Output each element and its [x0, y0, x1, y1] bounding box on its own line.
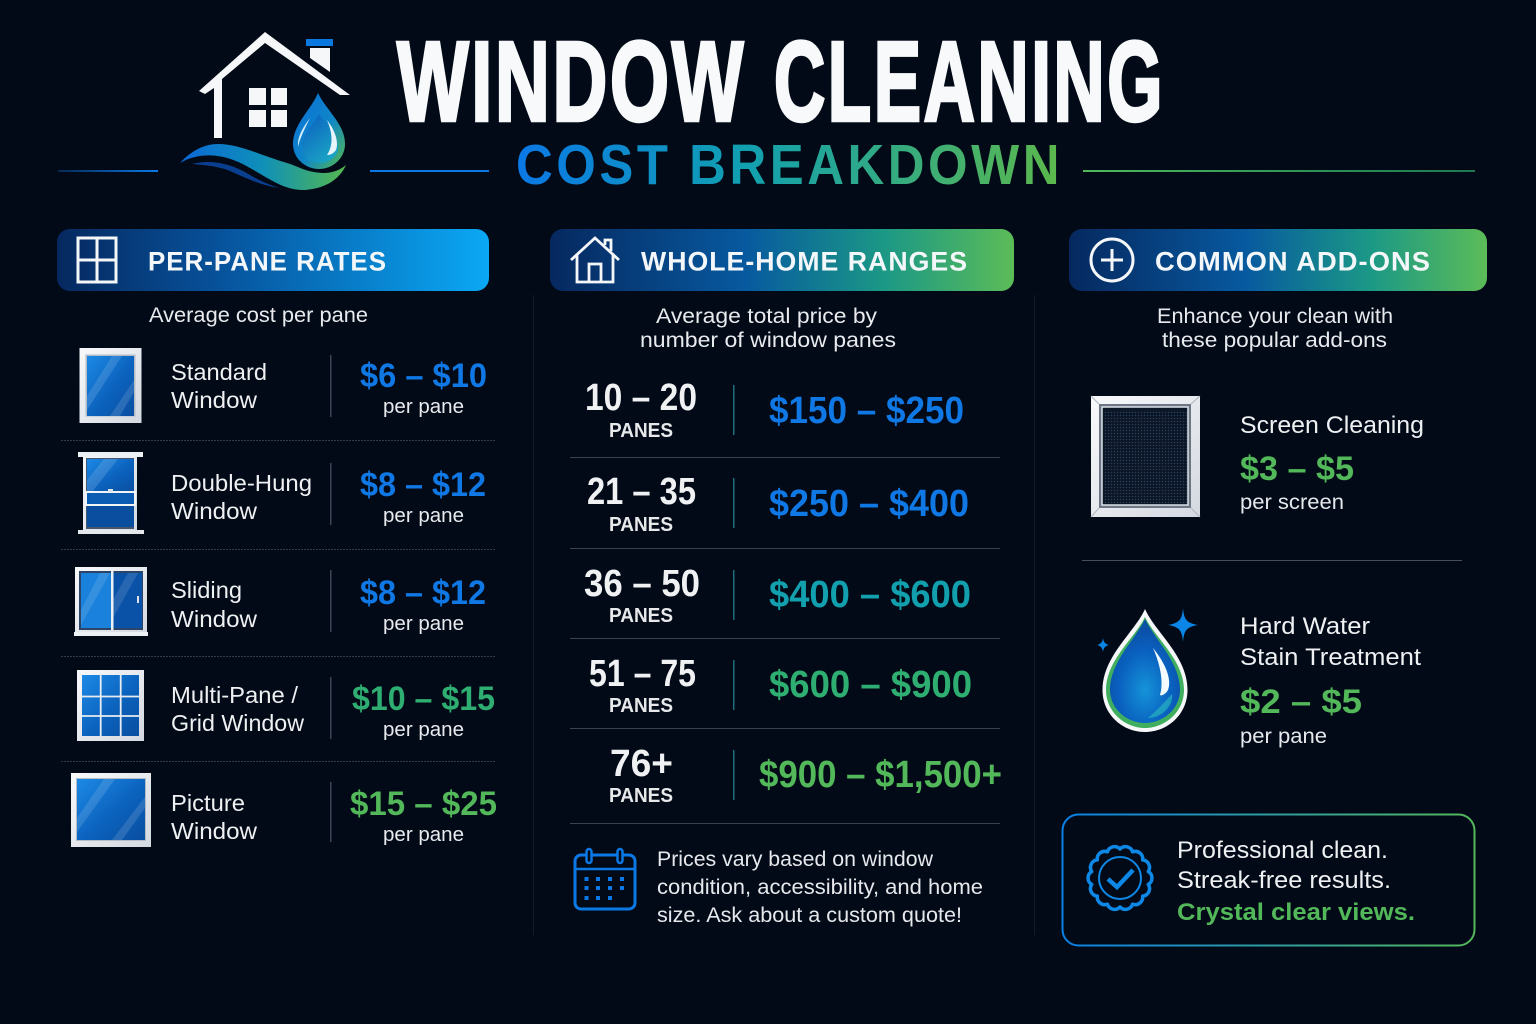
- row: double-hung window: per pane: [383, 504, 464, 527]
- row: sliding window: Window: [171, 606, 257, 632]
- row: 51-75 panes: 51 – 75: [589, 653, 696, 695]
- row: 76+ panes: 76+: [610, 743, 673, 785]
- panel: whole-home ranges: [550, 229, 1014, 927]
- row: 21-35 panes: [587, 471, 969, 536]
- row: 36-50 panes: PANES: [609, 604, 673, 627]
- row: 10-20 panes: [585, 377, 964, 442]
- row: 51-75 panes: $600 – $900: [769, 664, 972, 706]
- row: 21-35 panes: 21 – 35: [587, 471, 696, 513]
- row: standard window: per pane: [383, 395, 464, 418]
- icon: multi-pane window: [77, 670, 144, 741]
- row: sliding window: Sliding: [171, 577, 242, 603]
- row: double-hung window: $8 – $12: [360, 466, 486, 504]
- row: standard window: $6 – $10: [360, 357, 487, 395]
- icon: badge with check: [1088, 847, 1152, 909]
- row: 36-50 panes: [584, 563, 971, 627]
- text: pricing note: Prices vary based on window: [657, 848, 934, 871]
- row: 21-35 panes: PANES: [609, 513, 673, 536]
- icon: house roof and wall: [199, 32, 350, 138]
- heading: per-pane rates: [57, 229, 489, 291]
- add-on: hard water stain treatment: per pane: [1240, 725, 1327, 748]
- row: 51-75 panes: [589, 653, 972, 717]
- icon: water drop with sparkles: [1097, 608, 1198, 732]
- icon: picture window: [71, 773, 151, 847]
- text: whole-home description: [640, 304, 896, 352]
- row: sliding window: per pane: [383, 612, 464, 635]
- text: whole-home description: number of window panes: [640, 328, 896, 352]
- callout: crystal clear views: [1062, 814, 1474, 946]
- row: 76+ panes: [609, 743, 1002, 807]
- icon: house window: [249, 88, 287, 127]
- icon: plus in circle: [1091, 239, 1133, 281]
- heading: whole-home ranges: [550, 229, 1014, 291]
- row: 10-20 panes: 10 – 20: [585, 377, 697, 419]
- row: multi-pane window: [77, 670, 495, 741]
- text: pricing note: condition, accessibility, and home: [657, 876, 983, 899]
- row: 21-35 panes: $250 – $400: [769, 483, 969, 525]
- panel: common add-ons: [1062, 229, 1487, 946]
- row: 76+ panes: $900 – $1,500+: [759, 754, 1002, 796]
- add-on: screen cleaning: [1091, 396, 1424, 517]
- text: pricing note: [657, 848, 983, 927]
- logo: house with water drop: [180, 32, 350, 190]
- add-on: hard water stain treatment: $2 – $5: [1240, 683, 1362, 721]
- text: add-ons description: these popular add-ons: [1162, 328, 1387, 352]
- text: whole-home description: Average total price by: [656, 304, 877, 328]
- row: multi-pane window: $10 – $15: [352, 680, 495, 718]
- title: CLEANING: [774, 18, 1165, 144]
- row: picture window: Window: [171, 818, 257, 844]
- icon: window screen: [1091, 396, 1200, 517]
- heading text: PER-PANE RATES: [148, 246, 387, 276]
- row: standard window: [80, 348, 487, 423]
- callout: crystal clear views: Professional clean.: [1177, 837, 1388, 864]
- title: WINDOW: [397, 18, 746, 144]
- callout: crystal clear views: Streak-free results.: [1177, 867, 1391, 894]
- row: 10-20 panes: $150 – $250: [769, 390, 964, 432]
- add-on: screen cleaning: Screen Cleaning: [1240, 412, 1424, 439]
- row: multi-pane window: per pane: [383, 718, 464, 741]
- icon: window grid: [78, 238, 116, 282]
- row: double-hung window: Double-Hung: [171, 470, 312, 496]
- icon: house outline: [571, 238, 619, 282]
- icon: logo wave: [180, 144, 346, 190]
- panel: per-pane rates: [57, 229, 497, 847]
- text: pricing note: size. Ask about a custom quote!: [657, 904, 962, 927]
- row: double-hung window: [78, 452, 486, 534]
- row: picture window: Picture: [171, 790, 245, 816]
- row: multi-pane window: Multi-Pane /: [171, 682, 299, 708]
- row: picture window: per pane: [383, 823, 464, 846]
- add-on: hard water stain treatment: [1097, 608, 1421, 748]
- text: average cost per pane: Average cost per pane: [149, 303, 368, 327]
- row: multi-pane window: Grid Window: [171, 710, 304, 736]
- row: 51-75 panes: PANES: [609, 694, 673, 717]
- row: picture window: $15 – $25: [350, 785, 497, 823]
- row: 10-20 panes: PANES: [609, 419, 673, 442]
- row: standard window: Standard: [171, 359, 267, 385]
- add-on: screen cleaning: $3 – $5: [1240, 450, 1354, 488]
- title: [397, 18, 1165, 144]
- subtitle: COST BREAKDOWN: [516, 133, 1063, 197]
- row: 36-50 panes: $400 – $600: [769, 574, 971, 616]
- text: add-ons description: [1157, 304, 1393, 352]
- icon: standard window: [80, 348, 142, 423]
- row: double-hung window: Window: [171, 498, 257, 524]
- add-on: hard water stain treatment: Hard Water: [1240, 613, 1370, 640]
- icon: logo drop: [293, 93, 345, 169]
- add-on: hard water stain treatment: Stain Treatment: [1240, 644, 1421, 671]
- row: 36-50 panes: 36 – 50: [584, 563, 700, 605]
- icon: sliding window: [74, 567, 148, 636]
- callout: crystal clear views: Crystal clear views.: [1177, 899, 1415, 926]
- row: 76+ panes: PANES: [609, 784, 673, 807]
- row: sliding window: [74, 567, 486, 636]
- add-on: screen cleaning: per screen: [1240, 491, 1344, 514]
- heading text: WHOLE-HOME RANGES: [641, 246, 968, 276]
- icon: double-hung window: [78, 452, 144, 534]
- row: standard window: Window: [171, 387, 257, 413]
- heading: common add-ons: [1069, 229, 1487, 291]
- heading text: COMMON ADD-ONS: [1155, 246, 1431, 276]
- text: add-ons description: Enhance your clean with: [1157, 304, 1393, 328]
- row: sliding window: $8 – $12: [360, 574, 486, 612]
- row: picture window: [71, 773, 497, 847]
- icon: calendar: [575, 849, 635, 909]
- icon: chimney: [306, 39, 333, 72]
